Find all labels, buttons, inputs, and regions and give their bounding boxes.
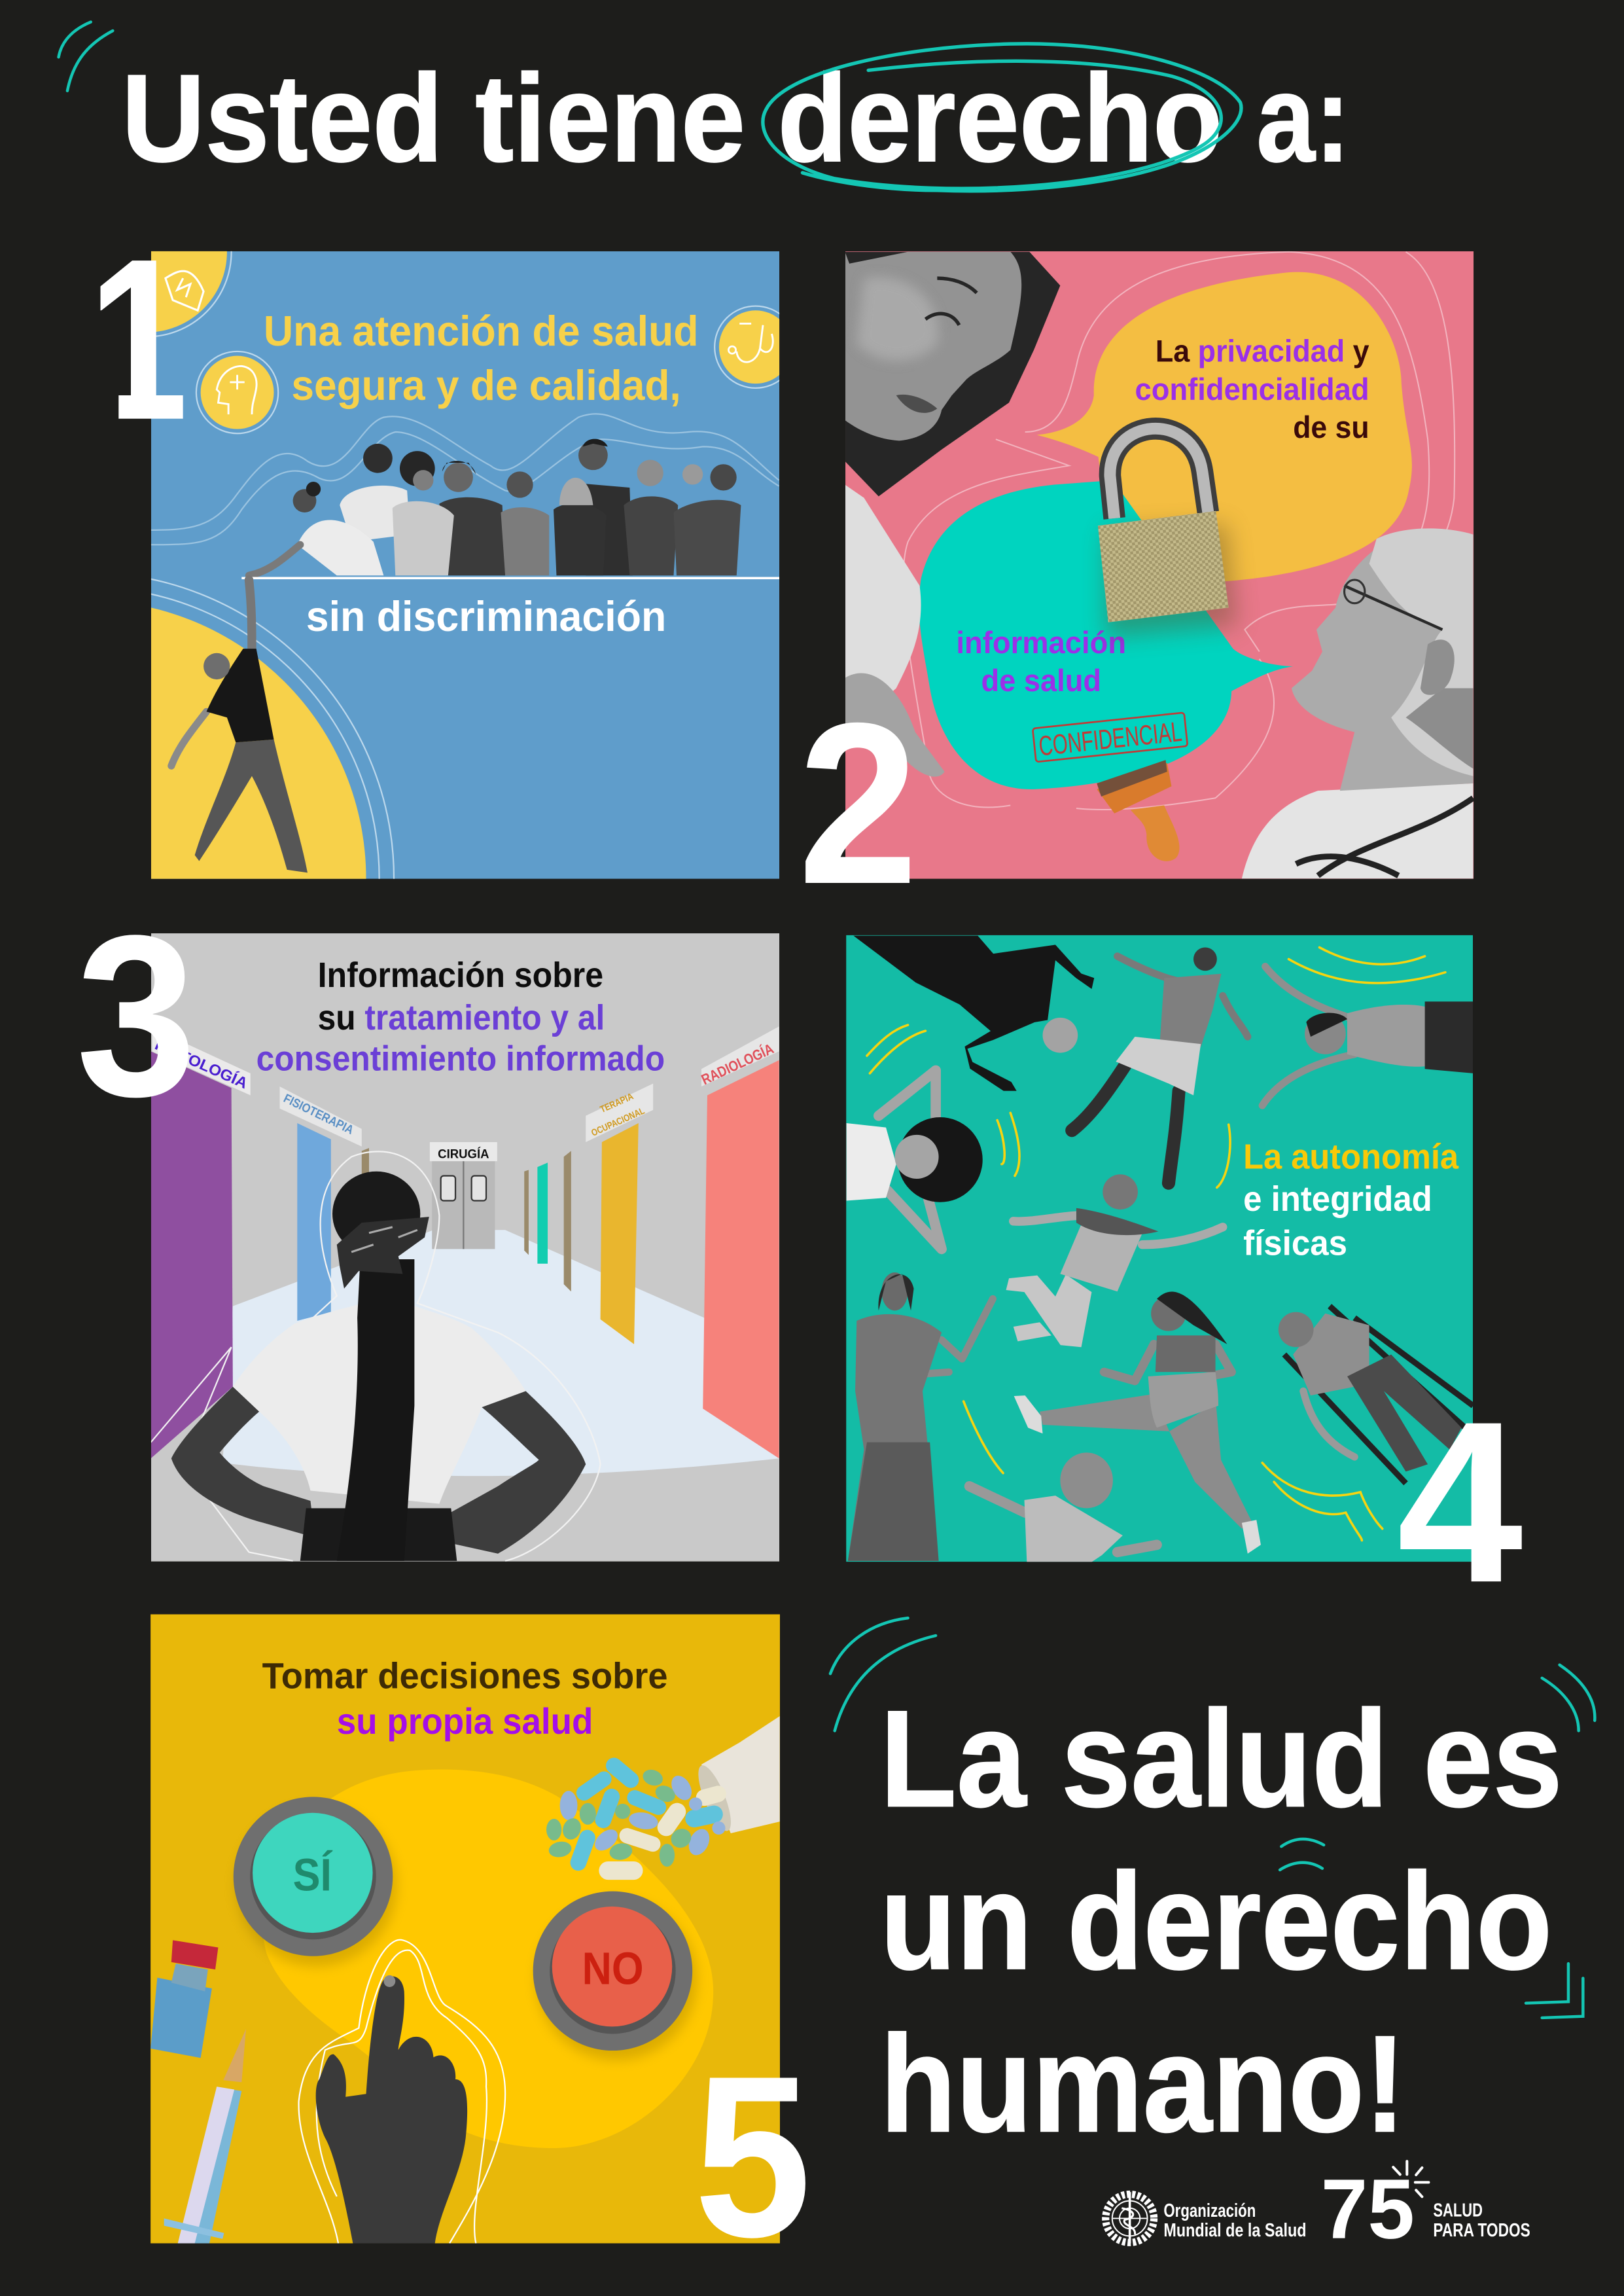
contour lines around woman bbox=[151, 1151, 601, 1561]
logo text: salud para todos: SALUD bbox=[1433, 2200, 1483, 2221]
sign: terapia ocupacional bbox=[586, 1084, 653, 1142]
photo: woman left bbox=[845, 252, 1060, 777]
text: informacion sobre: su tratamiento y al bbox=[318, 998, 605, 1037]
text: informacion de salud bbox=[958, 630, 1124, 691]
closing statement: humano! bbox=[880, 2007, 1406, 2161]
number 1: 1 bbox=[88, 211, 190, 468]
stamp text: confidencial bbox=[1033, 713, 1188, 762]
panel 3: tratamiento bbox=[151, 933, 779, 1562]
button: si: SÍ bbox=[293, 1849, 332, 1900]
text: autonomia: La autonomía bbox=[1243, 1137, 1459, 1176]
sign: terapia ocupacional: OCUPACIONAL bbox=[590, 1106, 646, 1139]
icon: pill bottle bbox=[692, 1716, 780, 1835]
text: informacion sobre: Información sobre bbox=[318, 956, 603, 995]
title: Usted tiene bbox=[122, 49, 745, 188]
photo: boy in wheelchair bbox=[1279, 1306, 1473, 1483]
photo: woman in hijab bbox=[1006, 1174, 1223, 1347]
text: privacidad: de su bbox=[1293, 410, 1369, 444]
photo: baby bbox=[970, 1452, 1157, 1562]
photo: woman right bbox=[1242, 528, 1473, 878]
yellow motion arcs bbox=[867, 947, 1445, 1541]
text: informacion sobre: consentimiento informado bbox=[256, 1039, 665, 1078]
panel 2: privacidad bbox=[845, 251, 1474, 879]
door: surgery bbox=[432, 1161, 495, 1249]
text: informacion de salud: información bbox=[956, 625, 1126, 660]
button: no: NO bbox=[582, 1943, 644, 1994]
panel 5: decisiones bbox=[150, 1614, 780, 2243]
hand-drawn ellipse around derecho bbox=[763, 44, 1241, 191]
number 2: 2 bbox=[798, 675, 918, 932]
sign: radiologia: RADIOLOGÍA bbox=[699, 1041, 776, 1088]
door: purple bbox=[151, 1051, 233, 1458]
logo text: organizacion mundial de la salud: Organización bbox=[1163, 2200, 1256, 2221]
contour lines around hand bbox=[298, 1940, 505, 2243]
photo: woman in sari bbox=[848, 1272, 993, 1561]
number 5: 5 bbox=[694, 2028, 811, 2285]
logo: 75 anniversary: 75 bbox=[1321, 2162, 1415, 2257]
number 3: 3 bbox=[76, 888, 196, 1144]
wavy contour lines bbox=[151, 414, 779, 545]
speech bubble: yellow bbox=[1037, 272, 1412, 581]
icon: padlock bbox=[1098, 429, 1237, 637]
title: derecho bbox=[777, 49, 1223, 188]
door: yellow bbox=[601, 1123, 639, 1344]
button: no bbox=[533, 1892, 697, 2060]
closing statement: La salud es bbox=[880, 1682, 1562, 1836]
text: privacidad: confidencialidad bbox=[1135, 372, 1369, 406]
photo: woman with braids bbox=[171, 1172, 586, 1561]
text: autonomia bbox=[1243, 1137, 1459, 1263]
door: blue bbox=[297, 1123, 331, 1321]
icon: stethoscope bbox=[714, 305, 780, 389]
title bbox=[122, 49, 1350, 188]
text: tomar decisiones bbox=[262, 1655, 668, 1742]
icon: heart in circle bbox=[150, 251, 232, 337]
text: tomar decisiones: su propia salud bbox=[337, 1700, 593, 1742]
logo text: salud para todos: PARA TODOS bbox=[1433, 2220, 1530, 2241]
text: informacion sobre bbox=[256, 956, 665, 1078]
sign: cirugia: CIRUGÍA bbox=[438, 1147, 489, 1162]
yellow circle with arcs bbox=[150, 579, 395, 879]
heading: una atencion bbox=[264, 307, 699, 409]
logo text: salud para todos bbox=[1433, 2200, 1530, 2241]
text: privacidad: La privacidad y bbox=[1156, 334, 1369, 368]
closing statement bbox=[880, 1682, 1562, 2161]
text: autonomia: e integridad bbox=[1243, 1179, 1432, 1219]
white ledge line bbox=[241, 577, 779, 579]
photo: dancing woman bbox=[1014, 1291, 1261, 1554]
corridor floor bbox=[222, 1230, 779, 1476]
number 4: 4 bbox=[1397, 1374, 1525, 1630]
closing statement: un derecho bbox=[880, 1844, 1552, 1998]
photo: hand pressing bbox=[316, 1975, 467, 2243]
title: a: bbox=[1256, 49, 1350, 188]
accent arcs around closing statement bbox=[830, 1618, 1595, 2018]
photo: hanging man bbox=[171, 580, 308, 872]
sign: cirugia bbox=[430, 1142, 497, 1162]
contour lines bbox=[903, 252, 1455, 810]
logo text: organizacion mundial de la salud: Mundial de la Salud bbox=[1163, 2220, 1307, 2241]
icon: syringe bbox=[164, 2029, 246, 2243]
heading: una atencion: Una atención de salud bbox=[264, 307, 699, 355]
text: privacidad bbox=[1136, 339, 1369, 439]
icon: vial bbox=[150, 1940, 218, 2058]
panel 1: atencion de salud bbox=[150, 251, 780, 879]
photo: woman afro bbox=[847, 1070, 983, 1249]
sign: histologia: HISTOLOGÍA bbox=[152, 1035, 251, 1092]
photo: group of people bbox=[249, 439, 741, 575]
logo text: organizacion mundial de la salud bbox=[1163, 2200, 1307, 2241]
logo: WHO emblem bbox=[1106, 2192, 1154, 2243]
sign: fisioterapia: FISIOTERAPIA bbox=[281, 1092, 356, 1138]
photo: running man bbox=[1072, 947, 1248, 1183]
doors: far corridor bbox=[362, 1148, 571, 1291]
text: informacion de salud: de salud bbox=[981, 663, 1101, 698]
accent arcs top left bbox=[59, 22, 113, 91]
text: autonomia: físicas bbox=[1243, 1223, 1347, 1263]
button: si bbox=[234, 1797, 397, 1967]
heading: una atencion: segura y de calidad, bbox=[291, 361, 681, 409]
text: tomar decisiones: Tomar decisiones sobre bbox=[262, 1655, 668, 1696]
photo: man in black bbox=[853, 936, 1094, 1091]
icon: pills bbox=[546, 1755, 728, 1880]
text: sin discriminacion: sin discriminación bbox=[306, 592, 666, 640]
icon: rubber stamp bbox=[1097, 760, 1180, 861]
stamp text: confidencial: CONFIDENCIAL bbox=[1037, 717, 1183, 762]
door: red bbox=[703, 1060, 779, 1458]
yellow blob bbox=[263, 1770, 713, 2148]
sign: terapia ocupacional: TERAPIA bbox=[599, 1091, 635, 1115]
icon: head with plus bbox=[196, 351, 278, 433]
panel 4: autonomia bbox=[846, 935, 1473, 1562]
speech bubble: teal bbox=[919, 480, 1293, 789]
photo: girl right bbox=[1262, 967, 1473, 1105]
